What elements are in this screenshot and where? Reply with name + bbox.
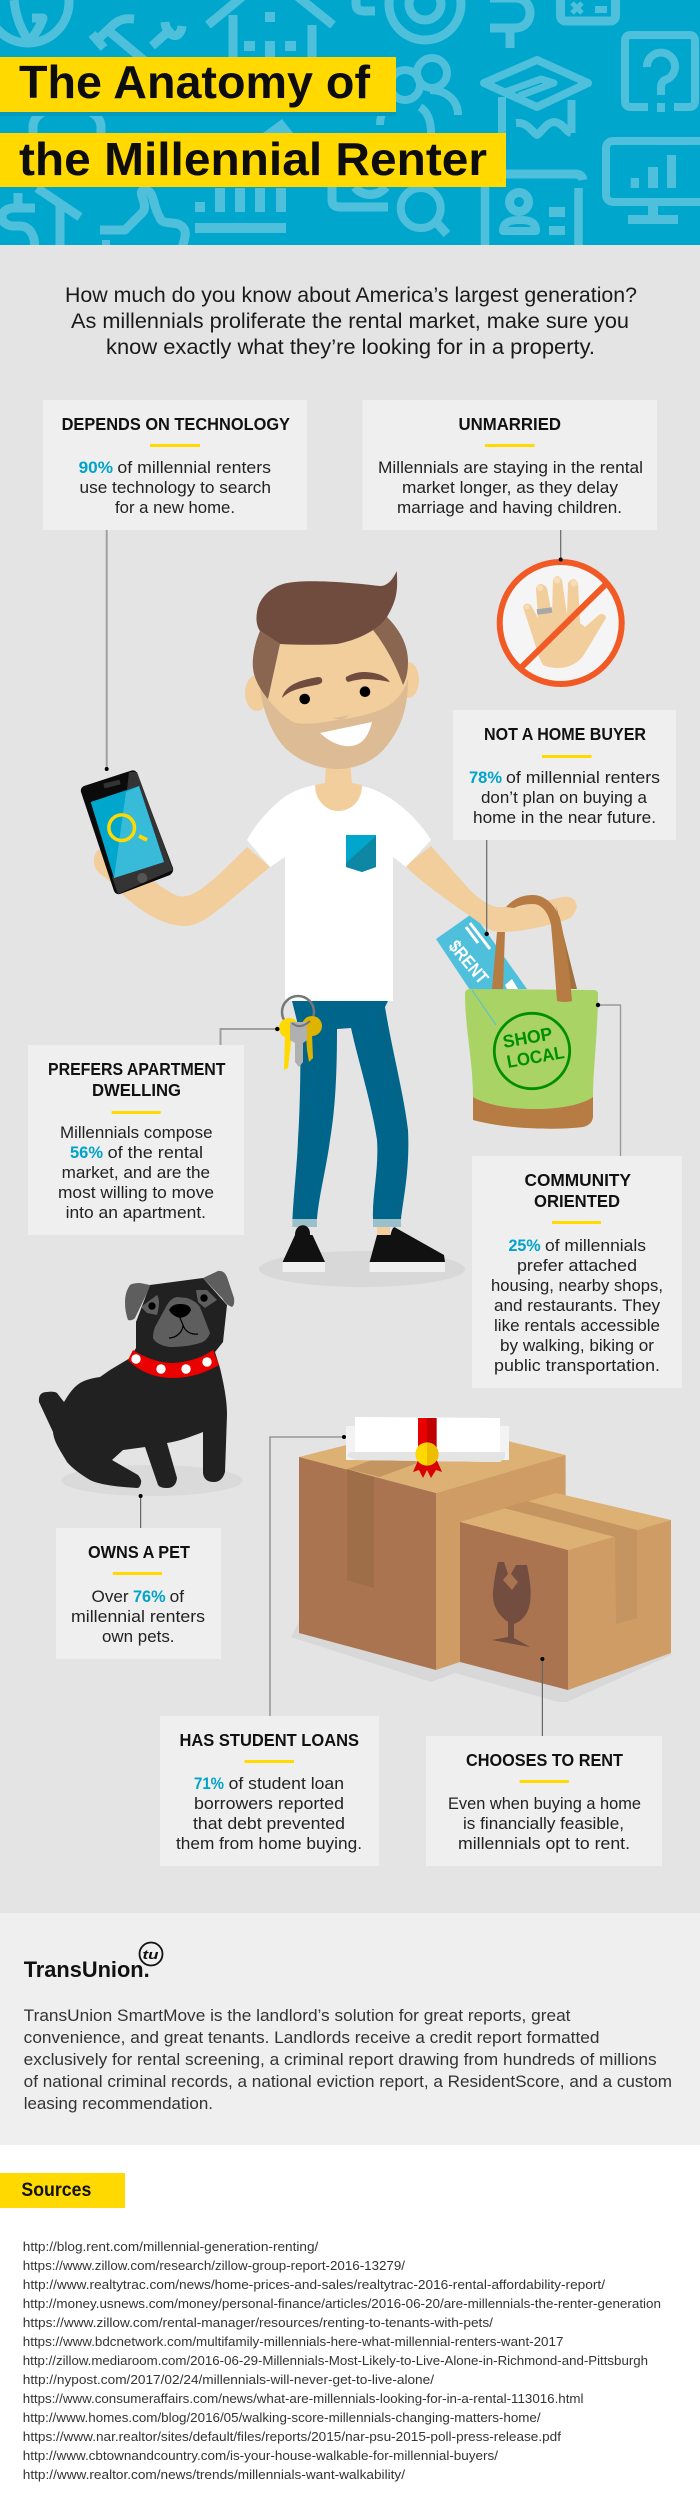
- shirt pocket: [346, 835, 376, 872]
- box: prefers apartment dwelling: most willing to move: [58, 1183, 214, 1202]
- rent sign: $RENT: [445, 936, 492, 988]
- right arm and hand: [405, 846, 577, 932]
- box: not a home buyer: of millennial renters: [506, 768, 660, 787]
- small box: [460, 1493, 671, 1690]
- TransUnion description: leasing recommendation.: [24, 2094, 213, 2113]
- connector: apartment to keys: [220, 1029, 277, 1045]
- TransUnion logo: TransUnion.: [24, 1957, 150, 1982]
- sources list: https://www.zillow.com/rental-manager/resources/renting-to-tenants-with-pets/: [23, 2315, 493, 2330]
- box: community oriented: and restaurants. They: [494, 1296, 661, 1315]
- nose shade: [333, 715, 349, 719]
- sources heading: Sources: [21, 2180, 91, 2201]
- box: has student loans: that debt prevented: [193, 1814, 345, 1833]
- TransUnion description: of national criminal records, a national eviction report, a ResidentScore, and a custom: [24, 2072, 672, 2091]
- sources list: http://zillow.mediaroom.com/2016-06-29-Millennials-Most-Likely-to-Live-Alone-in-Richmond-and-Pittsburgh: [23, 2353, 648, 2368]
- box: prefers apartment dwelling: into an apartment.: [66, 1203, 206, 1222]
- beard: [260, 680, 408, 769]
- intro text: [65, 284, 637, 359]
- TransUnion description: exclusively for rental screening, a criminal report drawing from hundreds of millions: [24, 2050, 657, 2069]
- box: prefers apartment dwelling: 56%: [70, 1143, 103, 1162]
- left shoe: [283, 1225, 325, 1272]
- icon: fragile glass: [492, 1562, 531, 1647]
- diploma scroll: [346, 1417, 509, 1478]
- box: has student loans: of student loan: [229, 1774, 344, 1793]
- box: not a home buyer: [453, 710, 676, 840]
- box: owns a pet: of: [170, 1587, 184, 1606]
- jeans: [292, 1001, 408, 1219]
- ears: [245, 662, 419, 711]
- box: community oriented: housing, nearby shops,: [491, 1276, 663, 1295]
- box: owns a pet: own pets.: [102, 1627, 174, 1646]
- box: unmarried: Millennials are staying in the rental: [378, 458, 643, 477]
- dog body: [39, 1278, 227, 1488]
- box: owns a pet: Over: [92, 1587, 129, 1606]
- box: depends on technology: for a new home.: [115, 498, 235, 517]
- header banner with icon pattern: [0, 0, 700, 250]
- figure shadow: [259, 1251, 465, 1287]
- connector: community to bag: [598, 1005, 620, 1156]
- sources list: http://nypost.com/2017/02/24/millennials-will-never-get-to-live-alone/: [23, 2372, 434, 2387]
- sources list: http://blog.rent.com/millennial-generation-renting/: [23, 2239, 319, 2254]
- box: depends on technology: [43, 400, 307, 530]
- sources list: http://www.homes.com/blog/2016/05/walking-score-millennials-changing-matters-home/: [23, 2410, 541, 2425]
- TransUnion logo: [24, 1942, 163, 1982]
- TransUnion description: [24, 2006, 672, 2113]
- rent sign: [436, 913, 527, 990]
- box: chooses to rent: Even when buying a home: [448, 1794, 641, 1813]
- TransUnion logo: tu: [142, 1947, 159, 1962]
- shop local stamp: LOCAL: [505, 1042, 566, 1072]
- sources list: https://www.bdcnetwork.com/multifamily-millennials-here-what-millennial-renters-want-2017: [23, 2334, 563, 2349]
- box: depends on technology: DEPENDS ON TECHNOLOGY: [62, 414, 290, 434]
- illustration: black pug: [39, 1271, 234, 1488]
- dog nose and mouth: [169, 1304, 198, 1338]
- box: prefers apartment dwelling: of the rental: [108, 1143, 203, 1162]
- box: has student loans: HAS STUDENT LOANS: [180, 1730, 359, 1750]
- hand: [523, 576, 606, 668]
- title line one: The Anatomy of: [19, 56, 371, 108]
- box: community oriented: COMMUNITY: [524, 1170, 631, 1190]
- panel: TransUnion: [0, 1913, 700, 2145]
- box: community oriented: ORIENTED: [534, 1191, 620, 1211]
- right shoe: [370, 1227, 445, 1272]
- connector dots: [105, 558, 600, 1661]
- box: not a home buyer: don’t plan on buying a: [481, 788, 648, 807]
- sources heading: [0, 2173, 125, 2208]
- box: community oriented: like rentals accessible: [494, 1316, 660, 1335]
- box: chooses to rent: [426, 1736, 662, 1866]
- side hair: [253, 617, 408, 699]
- sources list: [23, 2239, 661, 2482]
- eyebrows: [282, 672, 390, 698]
- large box: [299, 1423, 566, 1670]
- box: community oriented: prefer attached: [517, 1256, 637, 1275]
- intro text: As millennials proliferate the rental market, make sure you: [71, 310, 629, 333]
- phone: [81, 770, 173, 894]
- box: community oriented: by walking, biking or: [500, 1336, 654, 1355]
- dog shadow: [61, 1465, 243, 1496]
- connector: student loans: [270, 1437, 344, 1716]
- box: chooses to rent: millennials opt to rent.: [458, 1834, 630, 1853]
- eyes: [299, 686, 370, 704]
- box: owns a pet: 76%: [133, 1587, 166, 1606]
- boxes shadow: [291, 1620, 671, 1702]
- box: unmarried: UNMARRIED: [458, 414, 561, 434]
- sources list: http://money.usnews.com/money/personal-finance/articles/2016-06-20/are-millennials-the-renter-generation: [23, 2296, 661, 2311]
- box: prefers apartment dwelling: [28, 1045, 244, 1235]
- sources list: https://www.consumeraffairs.com/news/what-are-millennials-looking-for-in-a-rental-113016.html: [23, 2391, 584, 2406]
- title line two: the Millennial Renter: [19, 133, 487, 185]
- box: owns a pet: millennial renters: [71, 1607, 205, 1626]
- box: unmarried: market longer, as they delay: [402, 478, 618, 497]
- box: has student loans: [160, 1716, 379, 1866]
- connector: chooses to rent: [541, 1659, 543, 1736]
- box: prefers apartment dwelling: PREFERS APARTMENT: [48, 1059, 226, 1079]
- t-shirt: [247, 785, 431, 1001]
- main grey panel: [0, 245, 700, 1913]
- illustration: millennial renter: [81, 571, 598, 1272]
- smile: [320, 722, 372, 746]
- icon: no ring hand: [500, 562, 622, 684]
- box: prefers apartment dwelling: Millennials compose: [60, 1123, 212, 1142]
- intro text: know exactly what they’re looking for in a property.: [106, 336, 595, 359]
- keys: [279, 996, 322, 1070]
- dog ears: [125, 1271, 234, 1320]
- box: owns a pet: OWNS A PET: [88, 1542, 190, 1562]
- sources list: http://www.realtytrac.com/news/home-prices-and-sales/realtytrac-2016-rental-affordability-report/: [23, 2277, 605, 2292]
- dog muzzle: [153, 1297, 210, 1347]
- box: chooses to rent: CHOOSES TO RENT: [466, 1750, 623, 1770]
- box: has student loans: them from home buying.: [176, 1834, 362, 1853]
- connector: unmarried to hand: [560, 530, 562, 559]
- box: has student loans: borrowers reported: [194, 1794, 344, 1813]
- box: has student loans: 71%: [194, 1774, 224, 1793]
- box: prefers apartment dwelling: DWELLING: [92, 1080, 181, 1100]
- box: not a home buyer: 78%: [469, 768, 502, 787]
- box: unmarried: [362, 400, 657, 530]
- connector: technology to phone: [106, 530, 108, 769]
- sources list: https://www.zillow.com/research/zillow-group-report-2016-13279/: [23, 2258, 405, 2273]
- intro text: How much do you know about America’s largest generation?: [65, 284, 637, 307]
- shop local stamp: [494, 1013, 570, 1089]
- box: prefers apartment dwelling: market, and are the: [62, 1163, 210, 1182]
- connector: pet: [140, 1496, 142, 1528]
- TransUnion description: convenience, and great tenants. Landlords receive a credit report formatted: [24, 2028, 599, 2047]
- box: community oriented: of millennials: [545, 1236, 646, 1255]
- box: owns a pet: [56, 1528, 221, 1659]
- box: depends on technology: use technology to search: [80, 478, 271, 497]
- quiff hair: [256, 571, 397, 645]
- box: not a home buyer: home in the near future.: [473, 808, 656, 827]
- dog collar: [128, 1350, 219, 1378]
- bag handle back: [492, 905, 577, 989]
- box: depends on technology: of millennial renters: [117, 458, 271, 477]
- TransUnion description: TransUnion SmartMove is the landlord’s solution for great reports, great: [24, 2006, 571, 2025]
- illustration: moving boxes: [291, 1417, 671, 1702]
- sources list: http://www.realtor.com/news/trends/millennials-want-walkability/: [23, 2467, 405, 2482]
- connector: home buyer to rent sign: [486, 840, 488, 934]
- neck: [315, 760, 362, 811]
- sources list: http://www.cbtownandcountry.com/is-your-house-walkable-for-millennial-buyers/: [23, 2448, 498, 2463]
- box: not a home buyer: NOT A HOME BUYER: [484, 724, 646, 744]
- shop local stamp: SHOP: [501, 1024, 554, 1052]
- left arm and hand: [94, 847, 270, 926]
- box: depends on technology: 90%: [79, 458, 113, 477]
- sources list: https://www.nar.realtor/sites/default/files/reports/2015/nar-psu-2015-poll-press-release.pdf: [23, 2429, 561, 2444]
- box: community oriented: public transportation.: [494, 1356, 660, 1375]
- box: community oriented: 25%: [508, 1236, 541, 1255]
- box: community oriented: [472, 1156, 682, 1388]
- box: chooses to rent: is financially feasible,: [463, 1814, 624, 1833]
- shopping bag: [465, 895, 598, 1129]
- box: unmarried: marriage and having children.: [397, 498, 622, 517]
- dog eye patches: [141, 1290, 217, 1315]
- face: [268, 625, 408, 724]
- jeans cuffs: [292, 1219, 401, 1227]
